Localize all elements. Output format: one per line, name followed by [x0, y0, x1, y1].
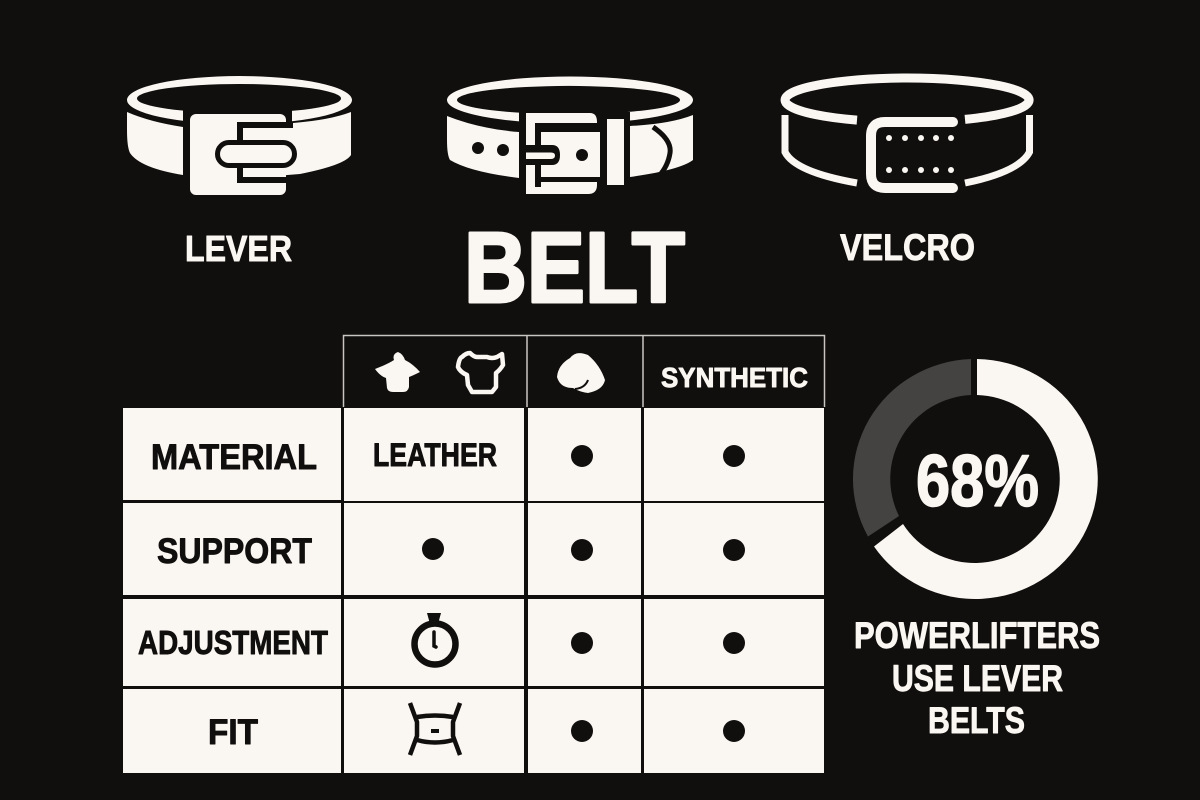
icon: cotton boll: [557, 353, 605, 393]
row: adjustment: [123, 599, 824, 686]
donut chart: 68%: [853, 359, 1098, 599]
callout: powerlifters use lever belts: POWERLIFTERS: [854, 615, 1100, 656]
header: synthetic: SYNTHETIC: [661, 362, 808, 393]
row: support: [123, 503, 824, 595]
callout: powerlifters use lever belts: USE LEVER: [892, 658, 1063, 699]
icon: waist belt: [410, 703, 460, 755]
callout: powerlifters use lever belts: BELTS: [928, 700, 1025, 741]
comparison table: [123, 336, 824, 773]
row: support: SUPPORT: [157, 532, 312, 571]
icon: velcro belt: [785, 78, 1030, 188]
label: lever: LEVER: [185, 228, 292, 269]
icon: classic prong belt: [447, 76, 693, 194]
icon: lever belt: [127, 76, 352, 195]
row: fit: [123, 689, 824, 773]
table header row: [344, 336, 824, 407]
icon: hide scrap: [375, 352, 420, 392]
donut chart: 68%: 68%: [916, 441, 1039, 522]
row: material: MATERIAL: [151, 438, 317, 477]
row: material: [123, 408, 824, 501]
row: material: LEATHER: [373, 437, 497, 473]
row: fit: FIT: [208, 713, 258, 752]
row: adjustment: ADJUSTMENT: [138, 624, 328, 661]
label: velcro: VELCRO: [840, 227, 975, 268]
title: BELT: [464, 212, 685, 324]
icon: cow hide outline: [458, 353, 503, 392]
icon: stopwatch: [414, 613, 456, 664]
callout: powerlifters use lever belts: [854, 615, 1100, 741]
